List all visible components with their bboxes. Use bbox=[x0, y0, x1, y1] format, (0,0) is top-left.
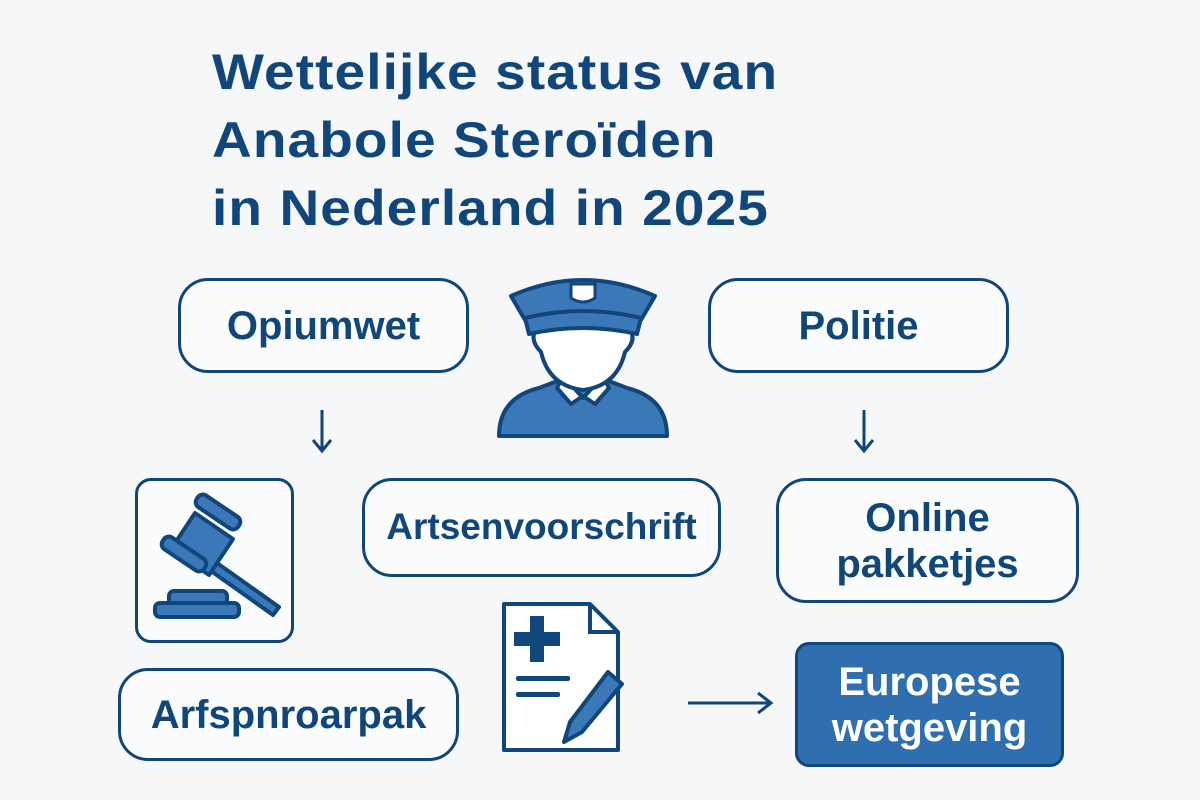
icon: police officer bbox=[497, 278, 669, 438]
arrow: down right bbox=[854, 410, 874, 454]
title: Anabole Steroïden bbox=[212, 112, 717, 168]
box: Online pakketjes bbox=[776, 478, 1079, 603]
box: Arfspnroarpak bbox=[118, 668, 459, 761]
box: Europese wetgeving bbox=[795, 642, 1064, 767]
box: Europese wetgeving: Europese bbox=[838, 660, 1021, 704]
box: Opiumwet bbox=[178, 278, 469, 373]
box: Artsenvoorschrift: Artsenvoorschrift bbox=[386, 506, 697, 547]
title: Wettelijke status van bbox=[212, 44, 778, 100]
title: in Nederland in 2025 bbox=[212, 180, 769, 236]
icon: gavel box bbox=[135, 478, 294, 643]
box: Online pakketjes: pakketjes bbox=[836, 542, 1019, 586]
box: Politie bbox=[708, 278, 1009, 373]
box: Europese wetgeving: wetgeving bbox=[832, 706, 1027, 750]
arrow: down left bbox=[312, 410, 332, 454]
icon: prescription document bbox=[502, 602, 624, 752]
box: Online pakketjes: Online bbox=[865, 496, 990, 540]
box: Opiumwet: Opiumwet bbox=[227, 304, 420, 348]
box: Arfspnroarpak: Arfspnroarpak bbox=[151, 692, 426, 736]
arrow: right bbox=[688, 692, 774, 714]
box: Artsenvoorschrift bbox=[362, 478, 721, 577]
title bbox=[212, 44, 778, 236]
box: Politie: Politie bbox=[798, 304, 919, 348]
